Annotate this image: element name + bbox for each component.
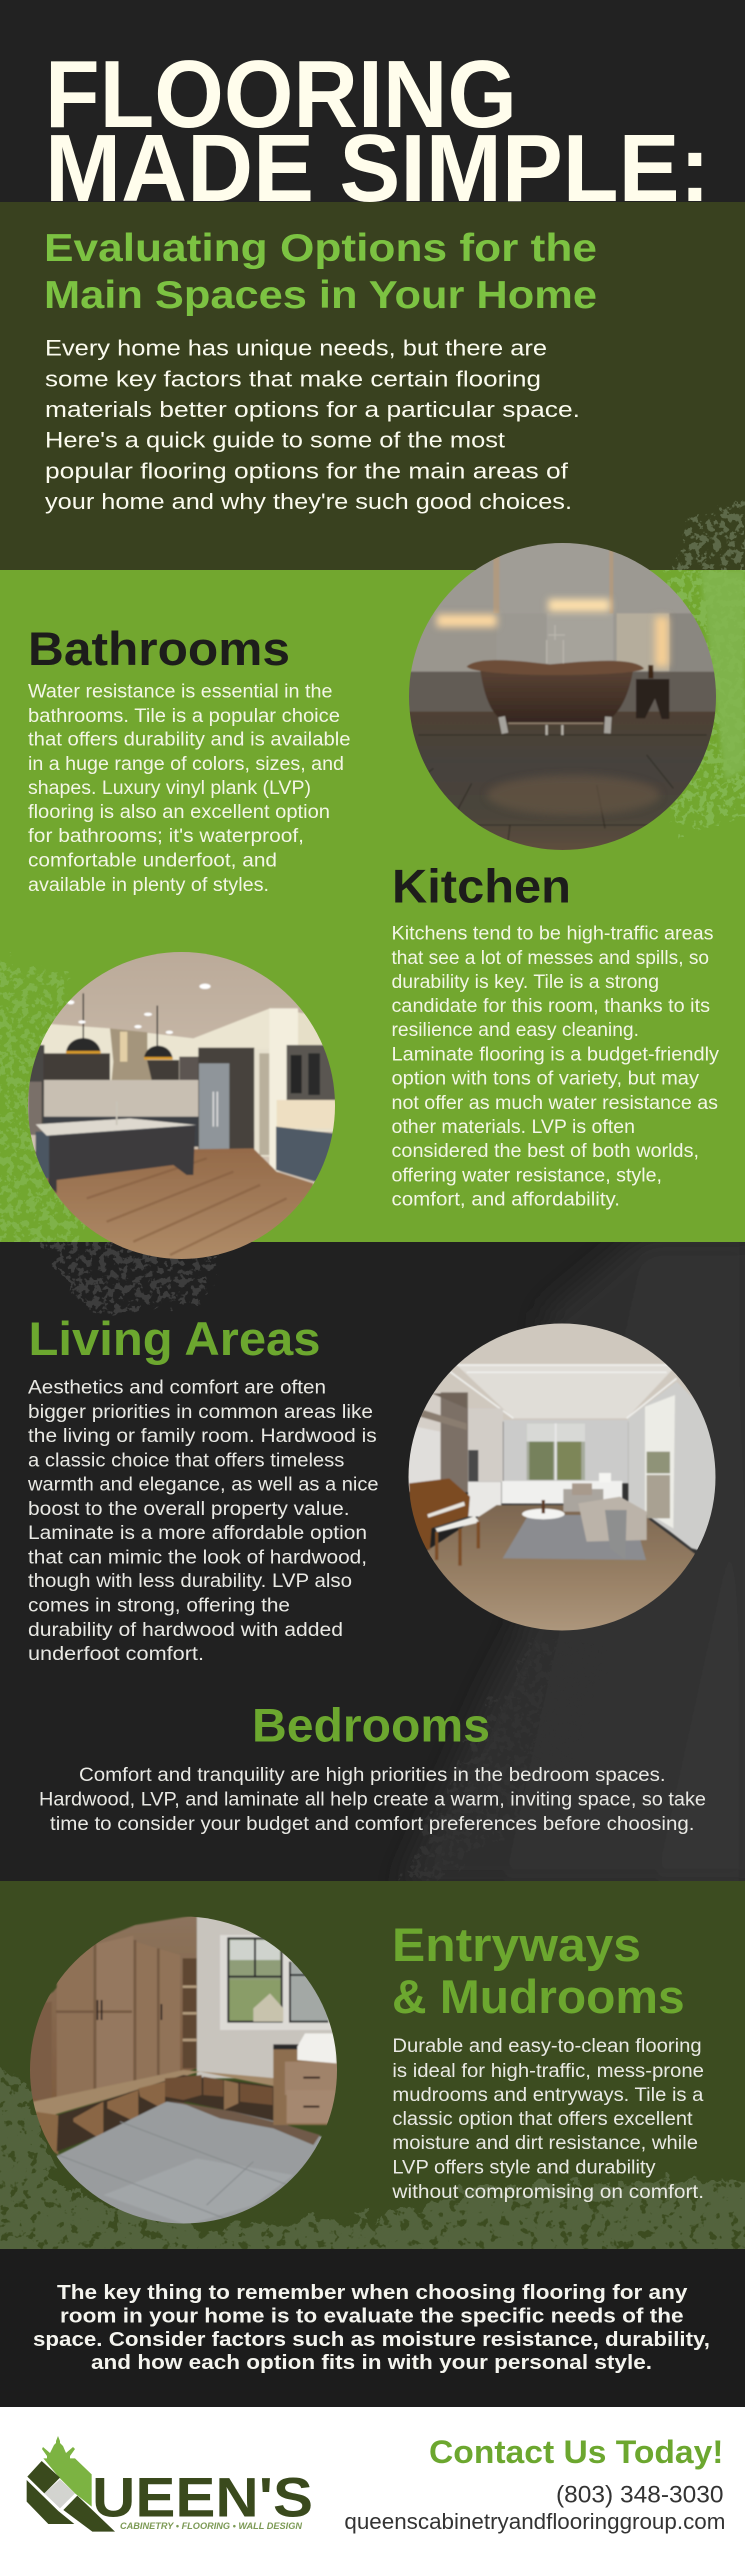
text: kitchen description: option with tons of variety, but may — [392, 1068, 700, 1090]
text: living areas description: warmth and elegance, as well as a nice — [27, 1475, 379, 1496]
text: living areas description — [27, 1378, 379, 1665]
text: kitchen description: offering water resistance, style, — [392, 1165, 662, 1186]
closing note text — [33, 2281, 710, 2374]
title: FLOORING — [45, 41, 517, 148]
text: kitchen description — [392, 923, 720, 1210]
title — [50, 60, 702, 202]
text: bathrooms description: in a huge range of colors, sizes, and — [28, 754, 344, 775]
text: bedrooms description: time to consider your budget and comfort preferences before choosing. — [50, 1814, 694, 1835]
text: living areas description: Aesthetics and comfort are often — [28, 1378, 326, 1398]
text: kitchen description: durability is key. Tile is a strong — [392, 972, 659, 993]
intro text: popular flooring options for the main areas of — [45, 458, 569, 483]
text: entryways description — [391, 2036, 704, 2203]
text: living areas description: underfoot comfort. — [28, 1644, 204, 1665]
text: kitchen description: other materials. LVP is often — [392, 1117, 635, 1138]
subtitle — [44, 227, 597, 317]
photo: bathroom with clawfoot tub — [409, 543, 716, 850]
text: bathrooms description — [28, 682, 351, 896]
panel: closing note — [0, 2249, 745, 2407]
heading: Contact Us Today: Contact Us Today! — [429, 2434, 724, 2470]
intro text — [45, 336, 580, 514]
text: entryways description: LVP offers style and durability — [392, 2158, 656, 2179]
closing note text: The key thing to remember when choosing flooring for any — [57, 2281, 688, 2304]
text: bathrooms description: for bathrooms; it's waterproof, — [28, 826, 304, 847]
title: MADE SIMPLE: — [45, 115, 710, 222]
text: kitchen description: resilience and easy cleaning. — [392, 1020, 639, 1041]
heading: Bedrooms: Bedrooms — [252, 1699, 490, 1752]
text: kitchen description: comfort, and affordability. — [392, 1189, 620, 1210]
panel: contact footer — [0, 2407, 745, 2560]
logo wordmark: UEEN'S — [92, 2466, 313, 2528]
closing note text: and how each option fits in with your personal style. — [91, 2351, 652, 2374]
text: kitchen description: Laminate flooring is a budget-friendly — [392, 1045, 720, 1066]
section: Bedrooms — [39, 1699, 706, 1835]
heading: Living Areas: Living Areas — [28, 1312, 320, 1365]
subtitle: Evaluating Options for the — [44, 227, 597, 270]
intro text: some key factors that make certain flooring — [45, 366, 541, 391]
icon: Q diamond mark — [27, 2458, 115, 2532]
text: bathrooms description: that offers durability and is available — [28, 730, 351, 751]
heading: Entryways and Mudrooms — [392, 1918, 685, 2023]
closing note text: room in your home is to evaluate the specific needs of the — [60, 2304, 684, 2328]
text: bathrooms description: bathrooms. Tile is a popular choice — [28, 706, 340, 727]
closing note text: space. Consider factors such as moisture resistance, durability, — [33, 2328, 710, 2351]
website: queenscabinetryandflooringgroup.com — [344, 2509, 725, 2534]
panel: living areas and bedrooms — [0, 1242, 745, 1881]
text: entryways description: moisture and dirt resistance, while — [392, 2133, 698, 2154]
subtitle: Main Spaces in Your Home — [44, 274, 597, 317]
photo: mudroom lockers — [30, 1916, 337, 2224]
text: bathrooms description: flooring is also an excellent option — [28, 802, 330, 823]
intro text: materials better options for a particular space. — [45, 397, 580, 422]
text: entryways description: without compromising on comfort. — [391, 2182, 704, 2203]
photo: living room — [408, 1324, 716, 1630]
text: living areas description: comes in strong, offering the — [28, 1595, 290, 1616]
text: living areas description: though with less durability. LVP also — [28, 1571, 352, 1592]
icon: crown — [42, 2436, 75, 2459]
section: Bathrooms — [28, 622, 351, 896]
section: Kitchen — [392, 860, 720, 1210]
text: kitchen description: that see a lot of messes and spills, so — [392, 948, 709, 969]
text: bedrooms description: Hardwood, LVP, and laminate all help create a warm, inviting space, so take — [39, 1790, 706, 1811]
logo: Queen's — [27, 2436, 313, 2532]
intro text: your home and why they're such good choices. — [45, 489, 572, 514]
panel: bathrooms and kitchen — [0, 570, 745, 1242]
text: living areas description: the living or family room. Hardwood is — [28, 1426, 377, 1447]
heading: Entryways and Mudrooms: & Mudrooms — [392, 1970, 685, 2023]
text: bathrooms description: available in plenty of styles. — [28, 875, 269, 896]
text: entryways description: is ideal for high-traffic, mess-prone — [392, 2061, 704, 2082]
text: bedrooms description: Comfort and tranquility are high priorities in the bedroom spaces. — [79, 1765, 666, 1786]
heading: Entryways and Mudrooms: Entryways — [392, 1918, 641, 1971]
intro text: Every home has unique needs, but there are — [45, 336, 547, 360]
text: bathrooms description: Water resistance is essential in the — [28, 682, 333, 702]
text: kitchen description: not offer as much water resistance as — [392, 1093, 718, 1114]
text: kitchen description: candidate for this room, thanks to its — [392, 996, 710, 1017]
text: living areas description: a classic choice that offers timeless — [28, 1450, 344, 1472]
text: living areas description: Laminate is a more affordable option — [28, 1523, 367, 1544]
panel: title band — [0, 0, 745, 202]
section: Living Areas — [27, 1312, 379, 1665]
panel: intro — [0, 202, 745, 570]
logo tagline: CABINETRY • FLOORING • WALL DESIGN — [120, 2521, 303, 2531]
text: entryways description: Durable and easy-to-clean flooring — [392, 2036, 702, 2057]
text: bedrooms description — [39, 1765, 706, 1835]
text: living areas description: that can mimic the look of hardwood, — [28, 1548, 367, 1569]
text: living areas description: bigger priorities in common areas like — [28, 1402, 373, 1423]
photo: kitchen — [28, 952, 335, 1259]
panel: entryways and mudrooms — [0, 1881, 745, 2249]
text: entryways description: mudrooms and entryways. Tile is a — [392, 2085, 704, 2106]
intro text: Here's a quick guide to some of the most — [45, 428, 506, 452]
text: bathrooms description: comfortable underfoot, and — [28, 850, 277, 871]
section: Entryways and Mudrooms — [391, 1918, 704, 2203]
text: bathrooms description: shapes. Luxury vinyl plank (LVP) — [28, 778, 311, 799]
text: kitchen description: Kitchens tend to be high-traffic areas — [392, 923, 714, 944]
heading: Bathrooms: Bathrooms — [28, 622, 290, 675]
heading: Kitchen: Kitchen — [392, 860, 571, 913]
phone number: (803) 348-3030 — [556, 2482, 724, 2508]
text: kitchen description: considered the best of both worlds, — [392, 1141, 699, 1162]
text: entryways description: classic option that offers excellent — [392, 2109, 693, 2130]
text: living areas description: durability of hardwood with added — [28, 1620, 343, 1641]
contact details — [344, 2434, 725, 2534]
text: living areas description: boost to the overall property value. — [28, 1499, 350, 1520]
